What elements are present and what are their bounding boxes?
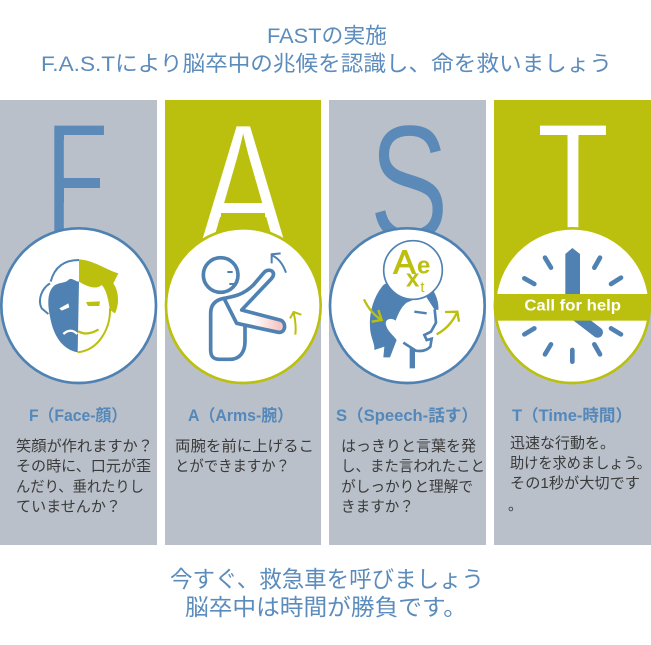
text: S [341, 438, 485, 516]
arrow: out [437, 312, 459, 334]
letter S: S [369, 92, 449, 276]
text: F: 笑顔が作れますか？ [16, 438, 153, 455]
title [41, 24, 612, 76]
text: A: 両腕を前に上げるこ [175, 438, 314, 455]
panel: T [488, 86, 651, 545]
text: T [508, 435, 651, 514]
speech bubble: e [417, 252, 430, 279]
closing message: 脳卒中は時間が勝負です。 [185, 594, 467, 620]
arrow: olive [290, 312, 301, 335]
arrow: in [364, 299, 382, 322]
text: F: その時に、口元が歪 [16, 458, 151, 475]
title: FASTの実施 [267, 24, 387, 48]
speech bubble: x [406, 266, 420, 293]
panel: S [329, 92, 486, 545]
text: T: 。 [508, 498, 523, 514]
text: T: その1秒が大切です [510, 475, 640, 492]
text: F: んだり、垂れたりし [16, 478, 144, 496]
text: T: 迅速な行動を。 [510, 435, 615, 452]
banner: call for help: Call for help [524, 298, 621, 315]
text: S: がしっかりと理解で [341, 478, 473, 496]
text: F: ていませんか？ [16, 498, 121, 516]
speech bubble: t [420, 280, 424, 296]
icon: clock [488, 228, 651, 383]
text: S: きますか？ [341, 498, 414, 516]
text: S: はっきりと言葉を発 [341, 438, 476, 455]
closing message [170, 566, 484, 620]
heading: F: F（Face-顔） [29, 406, 127, 425]
banner: call for help [488, 294, 651, 321]
heading: T: T（Time-時間） [512, 406, 632, 425]
text: A: とができますか？ [175, 458, 290, 475]
panel: A [165, 83, 321, 545]
closing message: 今すぐ、救急車を呼びましょう [170, 566, 484, 592]
heading: A: A（Arms-腕） [188, 406, 293, 425]
icon: arms [166, 228, 321, 383]
text: S: し、また言われたこと [341, 458, 485, 475]
letter A: A [196, 83, 291, 298]
speech bubble [384, 241, 442, 299]
letter F: F [46, 86, 108, 296]
text: F [16, 438, 153, 516]
text: A [175, 438, 314, 475]
icon: speech head [330, 228, 485, 383]
arrow: blue [272, 253, 286, 273]
heading: S: S（Speech-話す） [336, 406, 478, 425]
speech bubble: A [393, 244, 416, 281]
icon: face [1, 228, 156, 383]
letter T: T [537, 86, 609, 296]
title: F.A.S.Tにより脳卒中の兆候を認識し、命を救いましょう [41, 52, 612, 76]
panel: F [0, 86, 157, 545]
